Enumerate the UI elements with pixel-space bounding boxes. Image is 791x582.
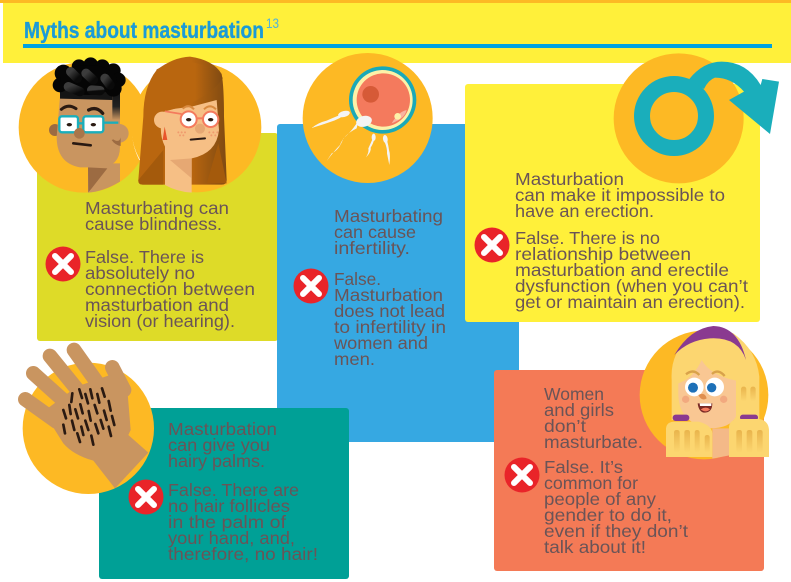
text: women and girls statement [544,384,643,452]
text: infertility answer [333,269,446,369]
panel: infertility myth [277,53,519,442]
panel: blindness myth [19,57,278,341]
icon: egg and sperm [303,53,433,183]
text: blindness statement [85,198,229,234]
title: Myths about masturbation [24,17,264,43]
icon: girl face [640,326,769,459]
text: infertility answer: Masturbation [334,285,443,305]
text: erection answer: masturbation and erectile [515,260,729,280]
text: infertility statement [334,206,443,258]
text: erection statement: Masturbation [515,169,624,189]
text: blindness statement: Masturbating can [85,198,229,218]
text: infertility statement: can cause [334,222,416,242]
icon: hairy hand [23,350,154,494]
text: women and girls answer: people of any [544,489,656,509]
text: women and girls answer: False. It’s [544,457,623,477]
text: hairy palms answer: your hand, and, [168,528,295,548]
panel: women and girls myth [494,326,769,571]
text: blindness answer: masturbation and [85,295,229,315]
text: hairy palms answer [168,480,318,564]
text: blindness answer: False. There is [85,247,204,267]
text: hairy palms answer: therefore, no hair! [168,544,318,564]
text: hairy palms statement: Masturbation [168,419,277,439]
text: women and girls statement: Women [544,384,604,404]
text: hairy palms statement: can give you [168,435,270,455]
text: women and girls statement: masturbate. [544,432,643,452]
text: women and girls answer: common for [544,473,638,493]
panel: hairy palms myth [23,350,349,579]
text: hairy palms answer: in the palm of [168,512,286,532]
text: infertility statement: Masturbating [334,206,443,226]
icon: false cross [128,480,164,514]
text: erection statement [515,169,725,221]
title: 13 [266,15,279,31]
text: erection answer: relationship between [515,244,691,264]
icon: male symbol [614,53,779,183]
text: hairy palms answer: no hair follicles [168,496,290,516]
text: women and girls answer: gender to do it, [544,505,672,525]
text: blindness answer: absolutely no [85,263,195,283]
panel: erection myth [465,53,779,322]
text: blindness statement: cause blindness. [85,214,222,234]
text: hairy palms answer: False. There are [168,480,299,500]
text: infertility statement: infertility. [334,238,410,258]
text: women and girls answer: even if they don’t [544,521,688,541]
text: erection statement: have an erection. [515,201,654,221]
text: infertility answer: does not lead [334,301,445,321]
text: erection answer: dysfunction (when you can’t [515,276,748,296]
text: erection answer: False. There is no [515,228,660,248]
icon: two faces [19,57,261,193]
text: infertility answer: men. [334,349,375,369]
text: women and girls statement: and girls [544,400,614,420]
text: women and girls answer [544,457,688,557]
icon: false cross [46,246,80,282]
text: erection statement: can make it impossible to [515,185,725,205]
text: blindness answer [85,247,255,331]
icon: false cross [504,458,540,492]
text: hairy palms statement: hairy palms. [168,451,265,471]
text: erection answer [515,228,748,312]
text: infertility answer: False. [334,269,381,289]
header band [0,0,791,63]
text: erection answer: get or maintain an erection). [515,292,745,312]
text: blindness answer: vision (or hearing). [85,311,235,331]
text: women and girls statement: don’t [544,416,586,436]
text: infertility answer: women and [333,333,428,353]
icon: false cross [474,228,510,262]
text: blindness answer: connection between [85,279,255,299]
text: infertility answer: to infertility in [334,317,446,337]
icon: false cross [294,268,328,304]
text: hairy palms statement [168,419,277,471]
text: women and girls answer: talk about it! [544,537,646,557]
